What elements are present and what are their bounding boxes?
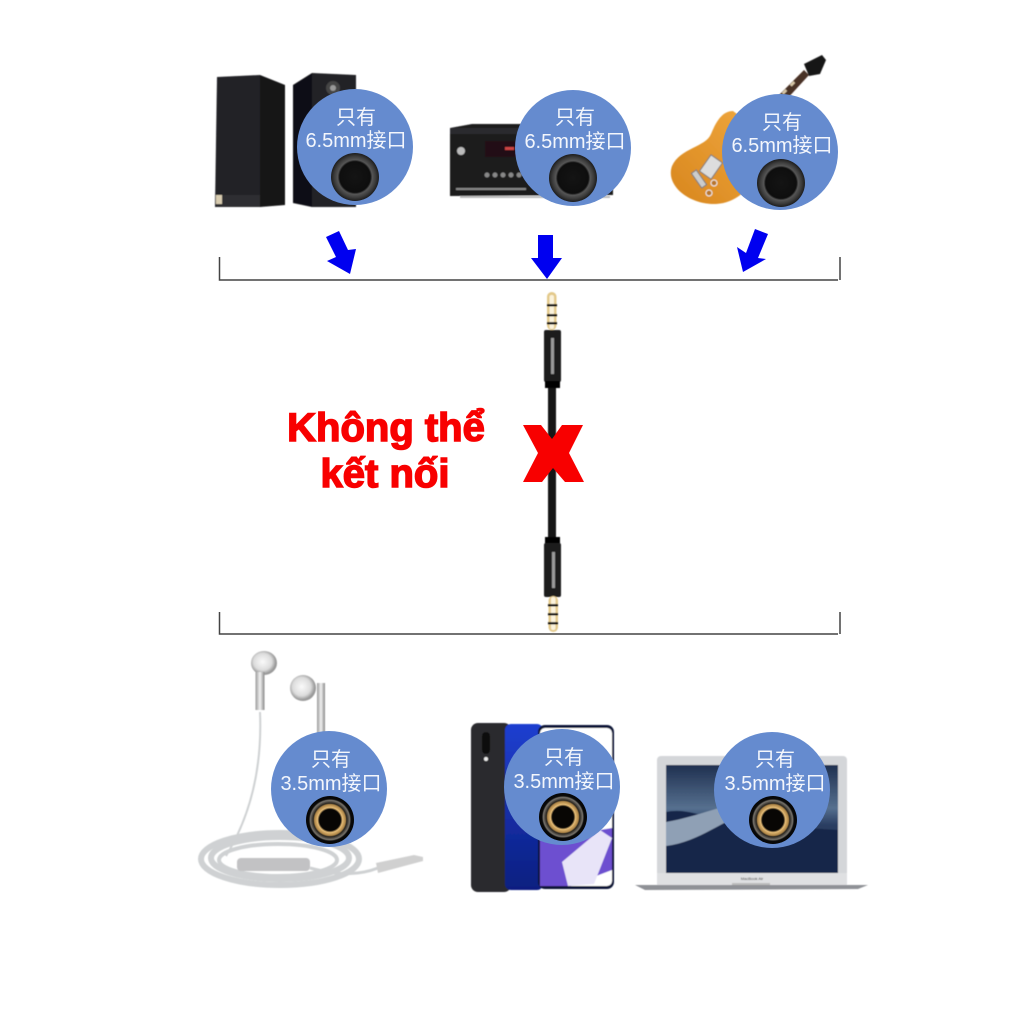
callout: 3.5mm port, smartphones: 3.5mm接口	[513, 770, 615, 793]
icon: earphones	[201, 651, 423, 885]
top bracket	[220, 257, 840, 280]
callout: 6.5mm port, guitar	[722, 94, 838, 210]
icon: laptop: MacBook Air	[741, 876, 764, 881]
arrow: left	[326, 231, 356, 274]
arrow: right	[737, 229, 768, 272]
callout: 3.5mm port, laptop: 只有	[755, 748, 795, 771]
bottom bracket	[220, 612, 840, 634]
callout: 6.5mm port, receiver: 6.5mm接口	[524, 130, 626, 153]
icon: electric guitar	[671, 55, 826, 204]
callout: 6.5mm port, speakers: 只有	[336, 106, 376, 129]
icon: pair of speakers	[215, 73, 356, 207]
callout: 6.5mm port, guitar: 6.5mm接口	[731, 134, 833, 157]
warning text: Không thể	[287, 406, 485, 450]
callout: 6.5mm port, receiver: 只有	[555, 106, 595, 129]
callout: 6.5mm port, receiver	[515, 90, 631, 206]
callout: 3.5mm port, smartphones	[504, 729, 620, 845]
callout: 3.5mm port, earphones: 3.5mm接口	[280, 772, 382, 795]
icon: laptop	[635, 756, 868, 890]
callout: 3.5mm port, laptop: 3.5mm接口	[724, 772, 826, 795]
callout: 3.5mm port, earphones: 只有	[311, 748, 351, 771]
arrow: centre	[531, 235, 562, 279]
callout: 3.5mm port, laptop	[714, 732, 830, 848]
icon: AV receiver	[450, 124, 613, 198]
icon: smartphones	[471, 723, 614, 892]
audio cable	[544, 292, 561, 632]
callout: 3.5mm port, earphones	[271, 731, 387, 847]
warning text: kết nối	[321, 452, 449, 496]
warning text	[287, 406, 485, 496]
callout: 6.5mm port, guitar: 只有	[762, 111, 802, 134]
callout: 3.5mm port, smartphones: 只有	[544, 746, 584, 769]
callout: 6.5mm port, speakers	[297, 89, 413, 205]
red cross	[523, 425, 584, 482]
callout: 6.5mm port, speakers: 6.5mm接口	[305, 129, 407, 152]
